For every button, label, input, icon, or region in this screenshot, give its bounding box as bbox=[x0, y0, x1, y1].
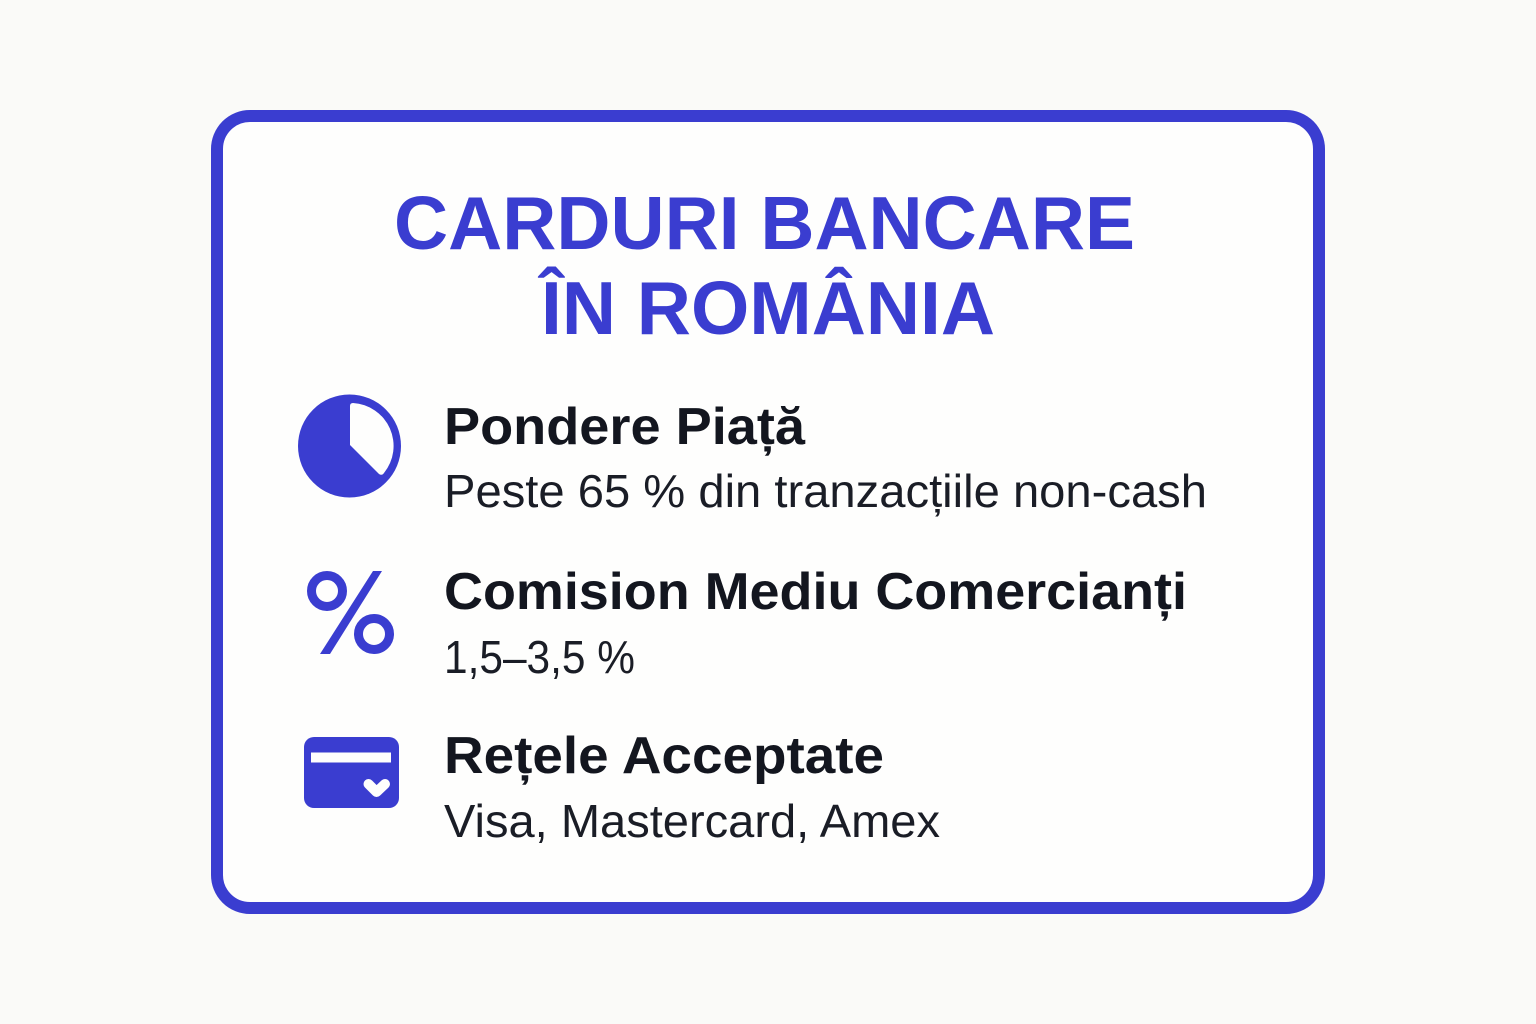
heading: Pondere Piață: Pondere Piață bbox=[444, 398, 806, 456]
icon: bank card with check bbox=[304, 737, 399, 808]
heading: Comision Mediu Comercianți: Comision Mediu Comercianți bbox=[444, 563, 1187, 621]
panel: main card with blue border bbox=[217, 116, 1319, 908]
row: merchant fee bbox=[312, 563, 1187, 683]
icon: pie chart bbox=[298, 394, 401, 498]
text: market share value: Peste 65 % din tranzacțiile non-cash bbox=[444, 465, 1207, 517]
title: CARDURI BANCARE bbox=[394, 181, 1135, 265]
title: ÎN ROMÂNIA bbox=[537, 266, 995, 350]
heading: Rețele Acceptate: Rețele Acceptate bbox=[444, 727, 884, 785]
row: market share bbox=[298, 394, 1207, 517]
text: fee value: 1,5–3,5 % bbox=[444, 631, 635, 683]
row: accepted networks bbox=[304, 727, 940, 847]
title bbox=[394, 181, 1135, 350]
icon: percent sign bbox=[312, 571, 390, 654]
text: networks value: Visa, Mastercard, Amex bbox=[444, 795, 940, 847]
